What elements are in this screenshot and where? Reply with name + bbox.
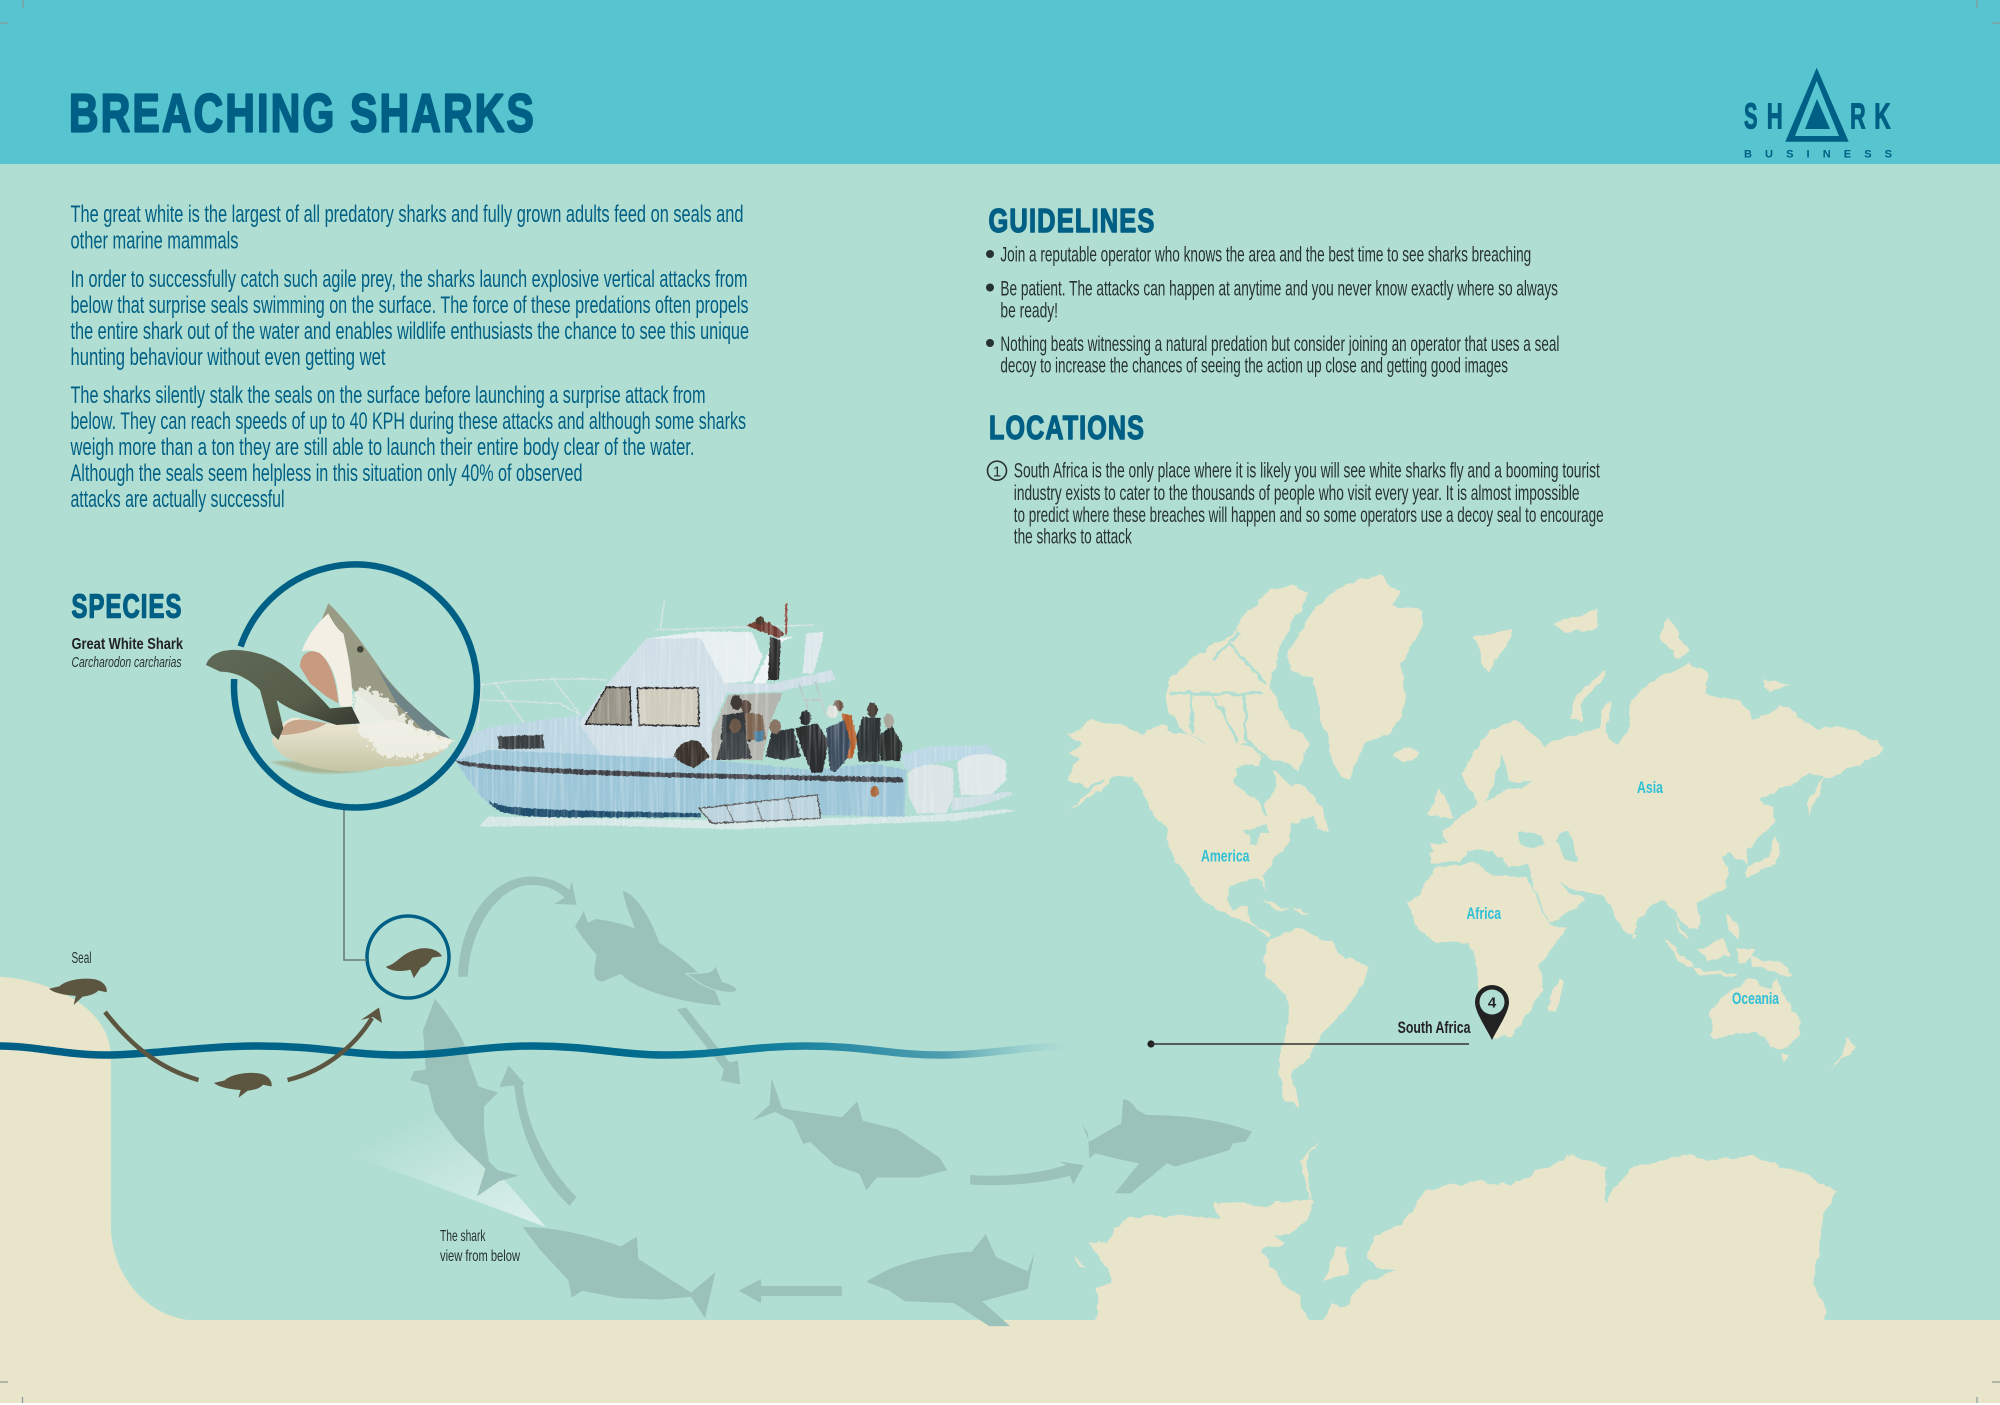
water under boat — [479, 809, 1017, 829]
locations text with number badge — [988, 460, 1604, 548]
guidelines list — [986, 244, 1559, 378]
map label: Asia: Asia — [1637, 778, 1663, 797]
outboard motors — [901, 745, 1012, 813]
lower jaw — [272, 718, 453, 771]
species heading: SPECIES — [72, 588, 182, 624]
guidelines list: Nothing beats witnessing a natural predation but consider joining an operator that uses a seal — [1000, 333, 1559, 356]
connector line from big circle to surface circle — [344, 810, 367, 960]
shark back — [320, 603, 450, 750]
cabin — [579, 638, 835, 760]
location pin: South Africa — [1475, 985, 1509, 1040]
intro text block: hunting behaviour without even getting wet — [70, 344, 386, 371]
boat with shark cage and people — [455, 600, 1017, 829]
intro text block: The sharks silently stalk the seals on the surface before launching a surprise attack from — [70, 382, 706, 409]
splash — [353, 688, 453, 758]
shark 2: vertical attack — [410, 999, 519, 1196]
leader line with dot — [1147, 1040, 1469, 1048]
cockpit door — [712, 693, 783, 760]
seal in surface circle — [386, 948, 442, 978]
logo: Shark Business: H — [1767, 96, 1783, 136]
lower mouth — [280, 720, 327, 735]
shark 3: middle — [752, 1078, 947, 1191]
big circle: shark catching seal — [206, 565, 477, 808]
seal swimming — [214, 1073, 272, 1098]
locations text with number badge: South Africa is the only place where it is likely you will see white sharks fly and a booming tourist — [1014, 460, 1600, 483]
eye — [357, 646, 364, 653]
guidelines list: decoy to increase the chances of seeing the action up close and getting good images — [1000, 355, 1508, 378]
rear frame — [803, 632, 824, 673]
label: The shark view from below: The shark — [440, 1228, 486, 1245]
arrow: leftward — [739, 1279, 842, 1303]
species name: Great White Shark — [72, 636, 183, 653]
shark 4: bottom left — [523, 1227, 716, 1318]
shark 6: right, over the map — [1082, 1099, 1252, 1193]
intro text block: The great white is the largest of all predatory sharks and fully grown adults feed on seals and — [70, 201, 744, 228]
locations text with number badge: to predict where these breaches will happen and so some operators use a decoy seal to encourage — [1014, 504, 1604, 527]
hunting cycle: grey sharks and arrows — [410, 877, 1084, 1326]
logo: Shark Business: S — [1744, 96, 1758, 136]
locations text with number badge: industry exists to cater to the thousands of people who visit every year. It is almost impossible — [1014, 482, 1580, 505]
intro text block: In order to successfully catch such agile prey, the sharks launch explosive vertical attacks from — [70, 266, 748, 293]
arrow: seal leaving water — [288, 1008, 382, 1080]
seal on shore — [49, 979, 107, 1005]
seal — [206, 650, 360, 740]
foredeck — [455, 715, 603, 760]
guidelines list: Be patient. The attacks can happen at anytime and you never know exactly where so always — [1000, 278, 1558, 300]
label: The shark view from below — [440, 1228, 520, 1265]
world map and antarctica — [1065, 576, 1884, 1337]
locations heading: LOCATIONS — [989, 409, 1145, 446]
shark 1: diving with seal — [563, 891, 737, 1006]
hull — [455, 733, 906, 817]
rails — [477, 600, 814, 733]
intro text block: below that surprise seals swimming on the surface. The force of these predations often propels — [70, 292, 748, 319]
surface circle callout — [367, 916, 449, 998]
hull stripe — [455, 760, 903, 783]
arrow: surface to shark — [458, 877, 577, 977]
arrow: downward — [677, 1008, 740, 1084]
shark 5: bottom middle — [866, 1234, 1035, 1326]
person on flybridge — [746, 603, 786, 680]
label: The shark view from below: view from below — [440, 1248, 520, 1265]
map label: America: America — [1201, 846, 1250, 866]
guidelines list: Join a reputable operator who knows the area and the best time to see sharks breaching — [1000, 244, 1531, 266]
guidelines list: be ready! — [1000, 300, 1058, 322]
intro text block: Although the seals seem helpless in this situation only 40% of observed — [70, 460, 582, 487]
waterline — [488, 800, 701, 817]
bow and cabin windows — [497, 687, 699, 749]
orange buoy — [870, 786, 879, 797]
group of people on deck — [674, 695, 903, 773]
shark cage — [699, 795, 821, 823]
shore: sand at left — [0, 977, 210, 1324]
header band — [0, 0, 2000, 164]
logo: Shark Business: K — [1874, 96, 1891, 136]
circle ring — [234, 565, 477, 808]
intro text block: below. They can reach speeds of up to 40 KPH during these attacks and although some sharks — [70, 408, 746, 435]
water surface line — [0, 1046, 1073, 1055]
intro text block: the entire shark out of the water and enables wildlife enthusiasts the chance to see this unique — [70, 318, 749, 345]
arrow: seal entering water — [105, 1012, 198, 1080]
white snout — [302, 613, 352, 707]
intro text block — [70, 201, 749, 513]
flybridge — [646, 632, 763, 683]
arrow: to shark 6 — [970, 1162, 1084, 1185]
intro text block: weigh more than a ton they are still able to launch their entire body clear of the water. — [70, 434, 695, 461]
label: South Africa: South Africa — [1398, 1018, 1471, 1037]
bottom land — [0, 1320, 2000, 1405]
guidelines heading: GUIDELINES — [988, 202, 1156, 239]
seal path: arrows and seals — [49, 948, 442, 1098]
light beam: view from below — [351, 1094, 546, 1227]
map label: Oceania: Oceania — [1732, 989, 1779, 1008]
location pin: South Africa: 4 — [1488, 994, 1497, 1012]
water below shark — [270, 761, 380, 773]
species name: Carcharodon carcharias — [72, 654, 182, 671]
locations text with number badge: the sharks to attack — [1014, 526, 1132, 548]
arrow: upward strike — [499, 1065, 577, 1206]
upper mouth — [300, 651, 338, 703]
species name — [72, 636, 183, 671]
logo: Shark Business: BUSINESS — [1744, 148, 1892, 160]
label: Seal: Seal — [72, 950, 92, 967]
intro text block: attacks are actually successful — [70, 486, 284, 513]
intro text block: other marine mammals — [70, 228, 238, 254]
ladder — [799, 682, 826, 717]
locations text with number badge: 1 — [993, 464, 1001, 480]
bridge post — [754, 637, 794, 683]
logo: Shark Business: R — [1850, 96, 1866, 136]
blue-grey tail shading — [377, 667, 450, 740]
map label: Africa: Africa — [1466, 904, 1501, 923]
logo: Shark Business — [1744, 68, 1892, 160]
title: BREACHING SHARKS — [69, 84, 536, 144]
